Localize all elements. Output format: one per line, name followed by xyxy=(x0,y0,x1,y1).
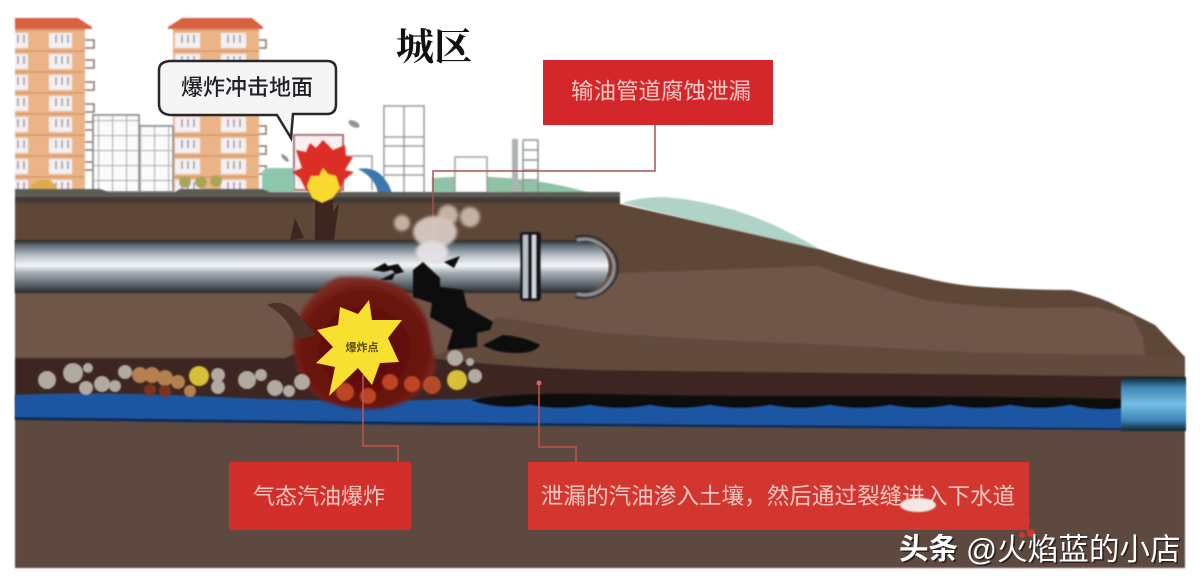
blue car debris xyxy=(358,168,392,194)
building: small frame behind blue car xyxy=(343,156,372,190)
explosion point star: 爆炸点 xyxy=(346,340,378,354)
surface explosion flame xyxy=(280,119,361,203)
building: grey pole xyxy=(512,139,518,194)
pipe flange xyxy=(520,232,541,301)
callout: seepage: 泄漏的汽油渗入土壤，然后通过裂缝进入下水道 xyxy=(541,484,1015,509)
sewer outlet pipe xyxy=(1121,377,1186,431)
red flame xyxy=(292,140,354,200)
soil lighter band xyxy=(15,266,1145,358)
yellow flame core xyxy=(307,168,340,203)
surface blast crack xyxy=(290,200,339,240)
watermark: @火焰蓝的小店 xyxy=(968,534,1182,568)
green hill on right xyxy=(622,197,822,251)
watermark: 头条 xyxy=(900,534,960,568)
callout: corrosion leak xyxy=(543,60,773,125)
panel: soil cross-section xyxy=(15,189,1185,568)
callout: corrosion leak: 输油管道腐蚀泄漏 xyxy=(571,79,751,104)
building: right tower xyxy=(168,18,266,192)
gas main pipe xyxy=(15,232,618,301)
title: 城区 xyxy=(396,27,472,69)
pipe elbow end xyxy=(535,240,609,293)
smoke cloud xyxy=(394,205,480,263)
building: grey office 2 xyxy=(139,126,173,192)
lower soil xyxy=(15,418,1185,568)
car: yellow xyxy=(28,180,57,194)
watermark: 头条 xyxy=(899,533,958,566)
torn callout corner specks xyxy=(1019,515,1035,538)
dark gravel layer xyxy=(15,340,1185,404)
pavement slabs xyxy=(15,189,620,197)
explosion red zone xyxy=(293,277,436,409)
soil main body xyxy=(15,196,1185,568)
crude leader through ground xyxy=(433,125,655,262)
building: left tower xyxy=(15,18,94,192)
green hill behind buildings xyxy=(432,177,590,193)
white blob on callout xyxy=(900,498,936,512)
pipe body xyxy=(15,240,545,293)
red leader lines xyxy=(363,375,576,462)
building: low block xyxy=(455,157,487,194)
panel: city skyline xyxy=(15,18,590,194)
callout: seepage xyxy=(528,462,1029,530)
explosion point star xyxy=(316,300,402,396)
watermark: @火焰蓝的小店 xyxy=(966,533,1181,567)
oil leak xyxy=(372,256,540,353)
soil darker band below xyxy=(430,317,1185,374)
trees xyxy=(179,175,222,188)
speech bubble: 爆炸冲击地面 xyxy=(181,75,313,100)
rubble xyxy=(38,350,482,404)
crack on left of blast xyxy=(267,303,316,340)
ground surface strip xyxy=(15,195,620,203)
black oil film on water xyxy=(470,394,1122,409)
callout: gas explosion xyxy=(229,462,411,530)
building: grey tower centre xyxy=(384,106,424,194)
green truck xyxy=(262,168,294,192)
sewer water xyxy=(15,393,1122,430)
building: small red frame xyxy=(294,135,343,190)
speech bubble xyxy=(159,61,336,138)
callout: gas explosion: 气态汽油爆炸 xyxy=(253,484,385,509)
building: ladder tower xyxy=(523,140,538,194)
building: grey office 1 xyxy=(93,115,139,192)
